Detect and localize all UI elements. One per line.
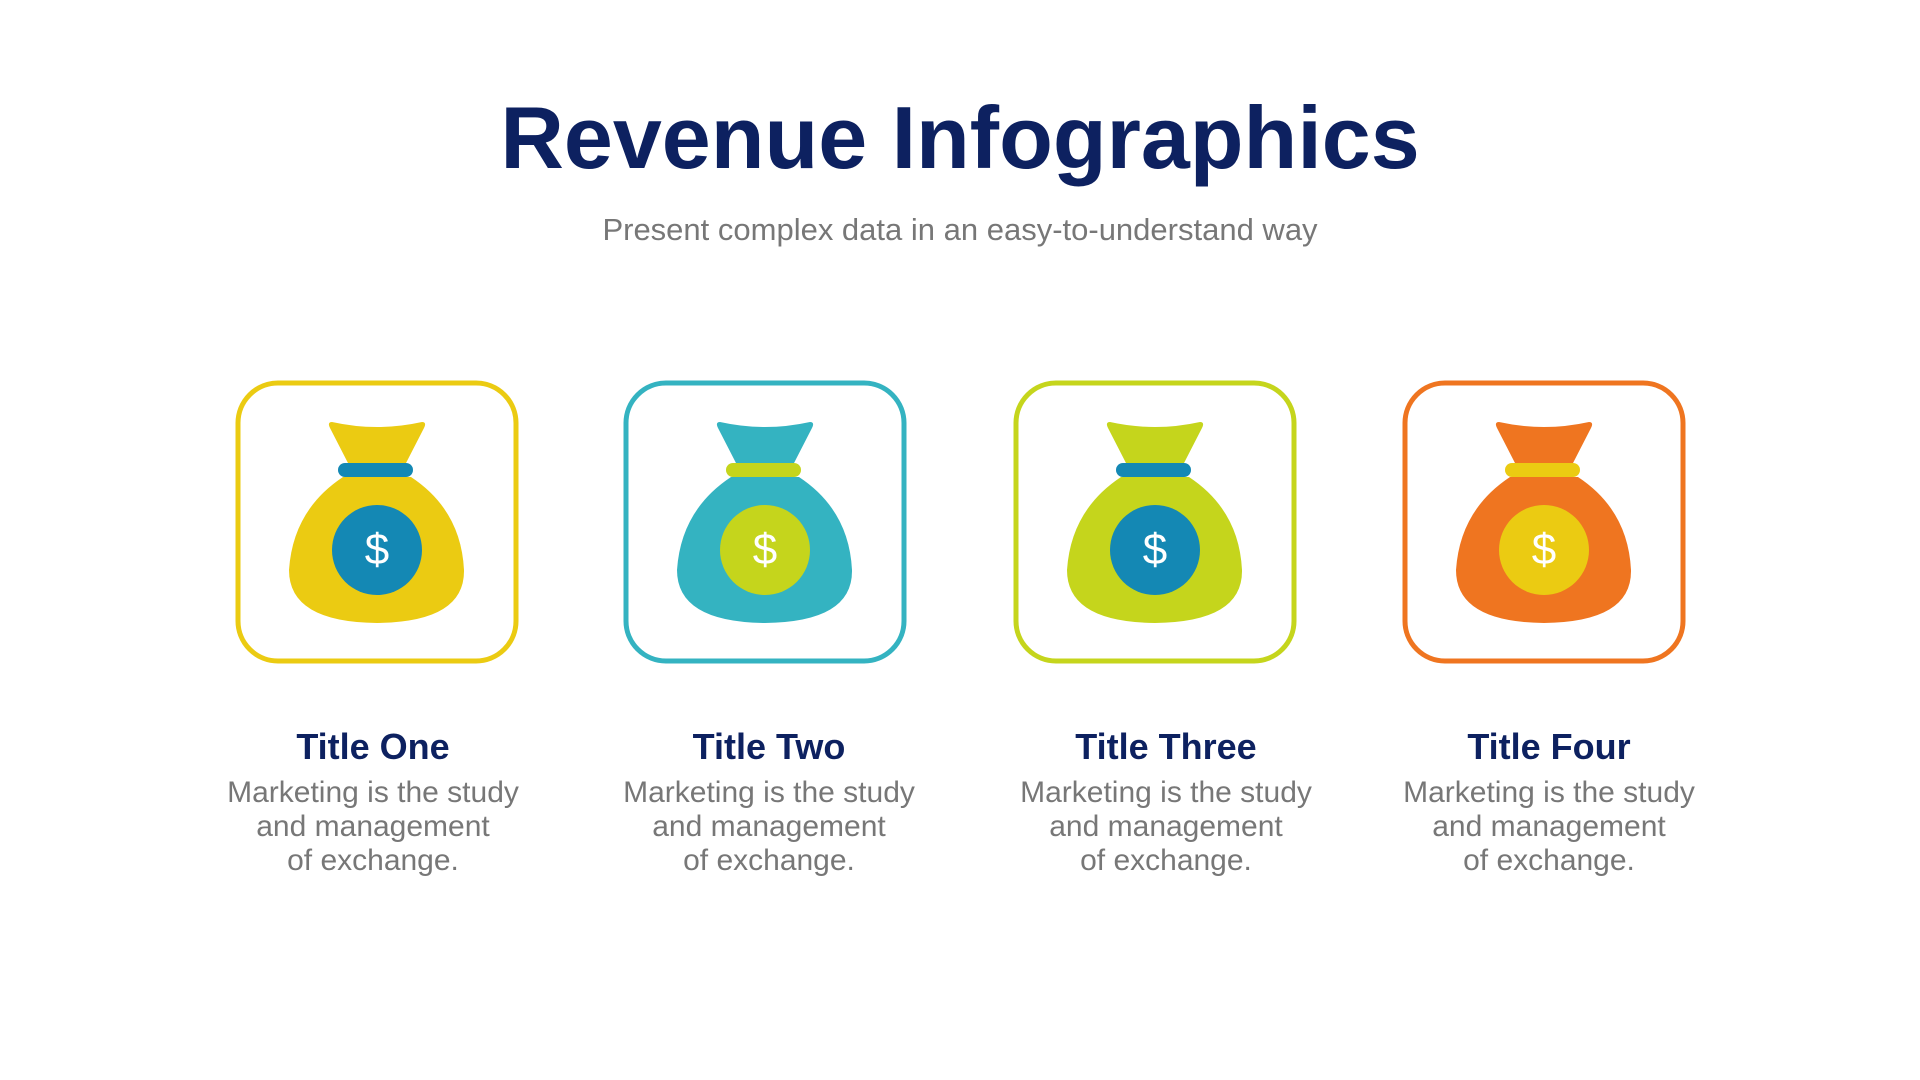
card 4: $ (1532, 525, 1556, 574)
text 2: of exchange. (683, 844, 855, 877)
text 2: Title Two (693, 726, 845, 767)
text 4: Title Four (1467, 726, 1631, 767)
card 1: $ (365, 525, 389, 574)
text 3 (1020, 726, 1312, 877)
text 1: Title One (296, 726, 450, 767)
card 1 (236, 380, 518, 664)
text 2 (623, 726, 915, 877)
card 3: $ (1143, 525, 1167, 574)
text 3: Marketing is the study (1020, 776, 1312, 809)
card 4 (1402, 380, 1686, 664)
subtitle: Present complex data in an easy-to-understand way (602, 212, 1318, 247)
text 4 (1403, 726, 1695, 877)
text 4: of exchange. (1463, 844, 1635, 877)
text 1: and management (256, 810, 490, 843)
text 1: Marketing is the study (227, 776, 519, 809)
text 1: of exchange. (287, 844, 459, 877)
text 4: and management (1432, 810, 1666, 843)
card 2: $ (753, 525, 777, 574)
card 2 (624, 380, 906, 664)
text 2: Marketing is the study (623, 776, 915, 809)
text 1 (227, 726, 519, 877)
text 3: and management (1049, 810, 1283, 843)
text 3: of exchange. (1080, 844, 1252, 877)
card 3 (1014, 380, 1296, 664)
text 2: and management (652, 810, 886, 843)
text 3: Title Three (1075, 726, 1257, 767)
title: Revenue Infographics (500, 88, 1420, 187)
text 4: Marketing is the study (1403, 776, 1695, 809)
